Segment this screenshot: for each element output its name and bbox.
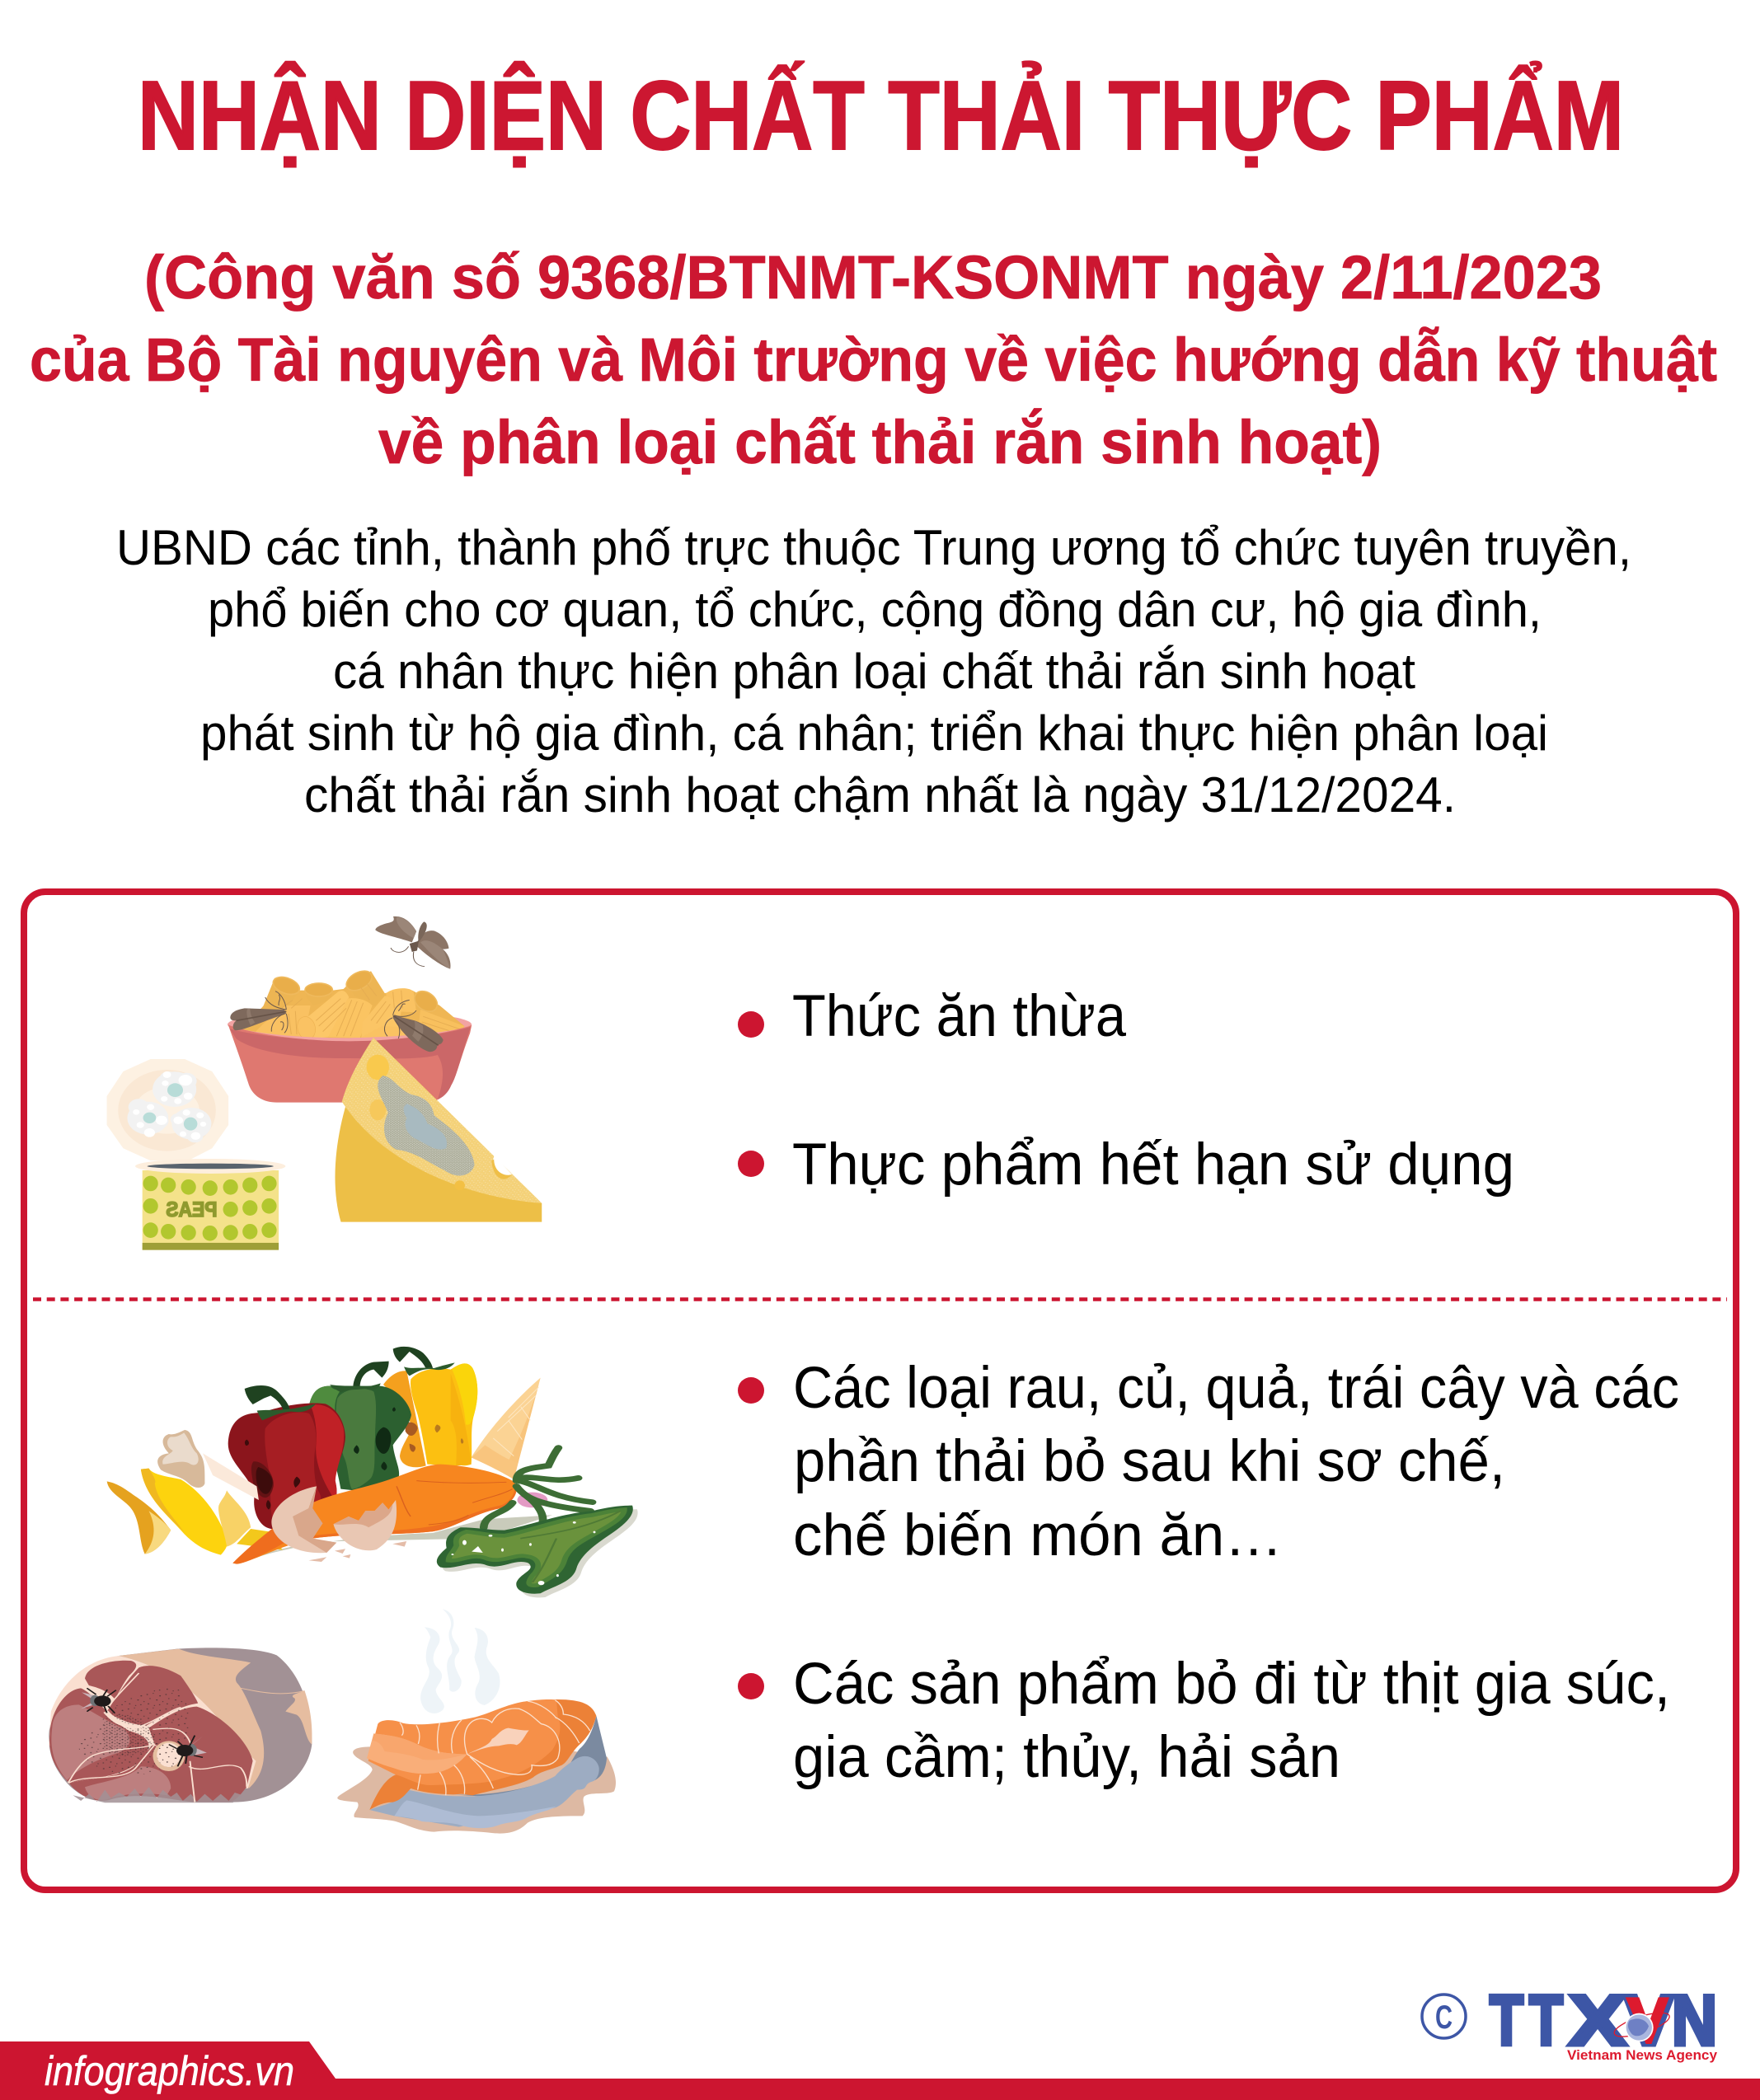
icon: carrot greens — [484, 1448, 593, 1527]
icon: cone and peppers — [228, 1347, 541, 1529]
logo letters: T — [1490, 1981, 1523, 2060]
bullet list: meat and seafood — [738, 1652, 1670, 1790]
intro text block: phổ biến cho cơ quan, tổ chức, cộng đồng dân cư, hộ gia đình, — [208, 582, 1542, 637]
icon: bone — [157, 1430, 259, 1500]
bullet list: vegetables and scraps: phần thải bỏ sau khi sơ chế, — [794, 1429, 1505, 1494]
panel: food waste types — [24, 892, 1736, 1890]
intro text block: UBND các tỉnh, thành phố trực thuộc Trung ương tổ chức tuyên truyền, — [116, 520, 1631, 575]
icon: spoiled salmon — [337, 1699, 616, 1834]
icon: green pepper — [309, 1362, 411, 1490]
logo letters: X — [1569, 1981, 1626, 2060]
icon: bowl front — [228, 1024, 472, 1103]
bullet list: vegetables and scraps — [738, 1356, 1679, 1568]
icon: banana peels — [107, 1469, 283, 1555]
bullet list: leftovers and expired food: Thực phẩm hết hạn sử dụng — [792, 1132, 1514, 1198]
logo letters: T — [1529, 1981, 1563, 2060]
logo letters — [1490, 1981, 1717, 2060]
intro text block: phát sinh từ hộ gia đình, cá nhân; triển khai thực hiện phân loại — [200, 705, 1548, 761]
icon: yellow pepper — [383, 1347, 477, 1467]
icon: can of peas: PEAS — [166, 1198, 217, 1221]
icon: flying moth — [375, 916, 450, 969]
logo letters: N — [1672, 1981, 1717, 2060]
logo emblem: red V and globe — [1612, 1997, 1672, 2044]
icon: spoiled ham with flies — [49, 1648, 312, 1802]
illustration: spoiled meat and fish — [49, 1609, 616, 1834]
icon: bowl back rim — [228, 1010, 472, 1038]
icon: carrot — [232, 1465, 517, 1564]
logo letters: V — [1624, 1981, 1673, 2060]
icon: egg shells — [271, 1486, 406, 1562]
icon: mouldy cheese — [335, 1038, 542, 1222]
intro text block: chất thải rắn sinh hoạt chậm nhất là ngày 31/12/2024. — [304, 767, 1456, 823]
footer label: infographics.vn — [45, 2048, 294, 2094]
footer band — [0, 2041, 1760, 2100]
bullet list: leftovers and expired food: Thức ăn thừa — [792, 984, 1126, 1049]
icon: copyright mark: C — [1435, 1999, 1453, 2036]
bullet list: meat and seafood: Các sản phẩm bỏ đi từ thịt gia súc, — [793, 1652, 1670, 1717]
icon: scraps in front — [107, 1430, 638, 1597]
icon: can of peas — [135, 1159, 285, 1250]
icon: opened lid with mould — [107, 1059, 228, 1160]
logo: TTXVN: Vietnam News Agency — [1567, 2047, 1718, 2063]
subtitle: official document reference: về phân loại chất thải rắn sinh hoạt) — [378, 408, 1382, 476]
icon: steam — [420, 1609, 500, 1713]
icon: ice cream cone — [472, 1378, 541, 1479]
bullet list: meat and seafood: gia cầm; thủy, hải sản — [793, 1725, 1340, 1790]
icon: pasta — [233, 967, 464, 1042]
intro text block — [116, 520, 1631, 823]
icon: red pepper — [228, 1385, 345, 1529]
subtitle: official document reference: (Công văn số 9368/BTNMT-KSONMT ngày 2/11/2023 — [144, 243, 1602, 312]
illustration: vegetable and fruit scraps — [107, 1347, 638, 1597]
intro text block: cá nhân thực hiện phân loại chất thải rắn sinh hoạt — [333, 644, 1415, 699]
icon: wilted leaf — [437, 1506, 638, 1597]
illustration: spoiled leftovers — [107, 916, 542, 1250]
logo: TTXVN — [1422, 1981, 1718, 2063]
bullet list: vegetables and scraps: chế biến món ăn… — [793, 1503, 1283, 1568]
ground shadow — [241, 1515, 552, 1563]
bullet list: vegetables and scraps: Các loại rau, củ, quả, trái cây và các — [793, 1356, 1679, 1421]
bullet list: leftovers and expired food — [738, 984, 1514, 1198]
subtitle: official document reference — [30, 243, 1717, 476]
icon: resting moths — [230, 991, 444, 1052]
icon: copyright mark — [1422, 1995, 1466, 2038]
